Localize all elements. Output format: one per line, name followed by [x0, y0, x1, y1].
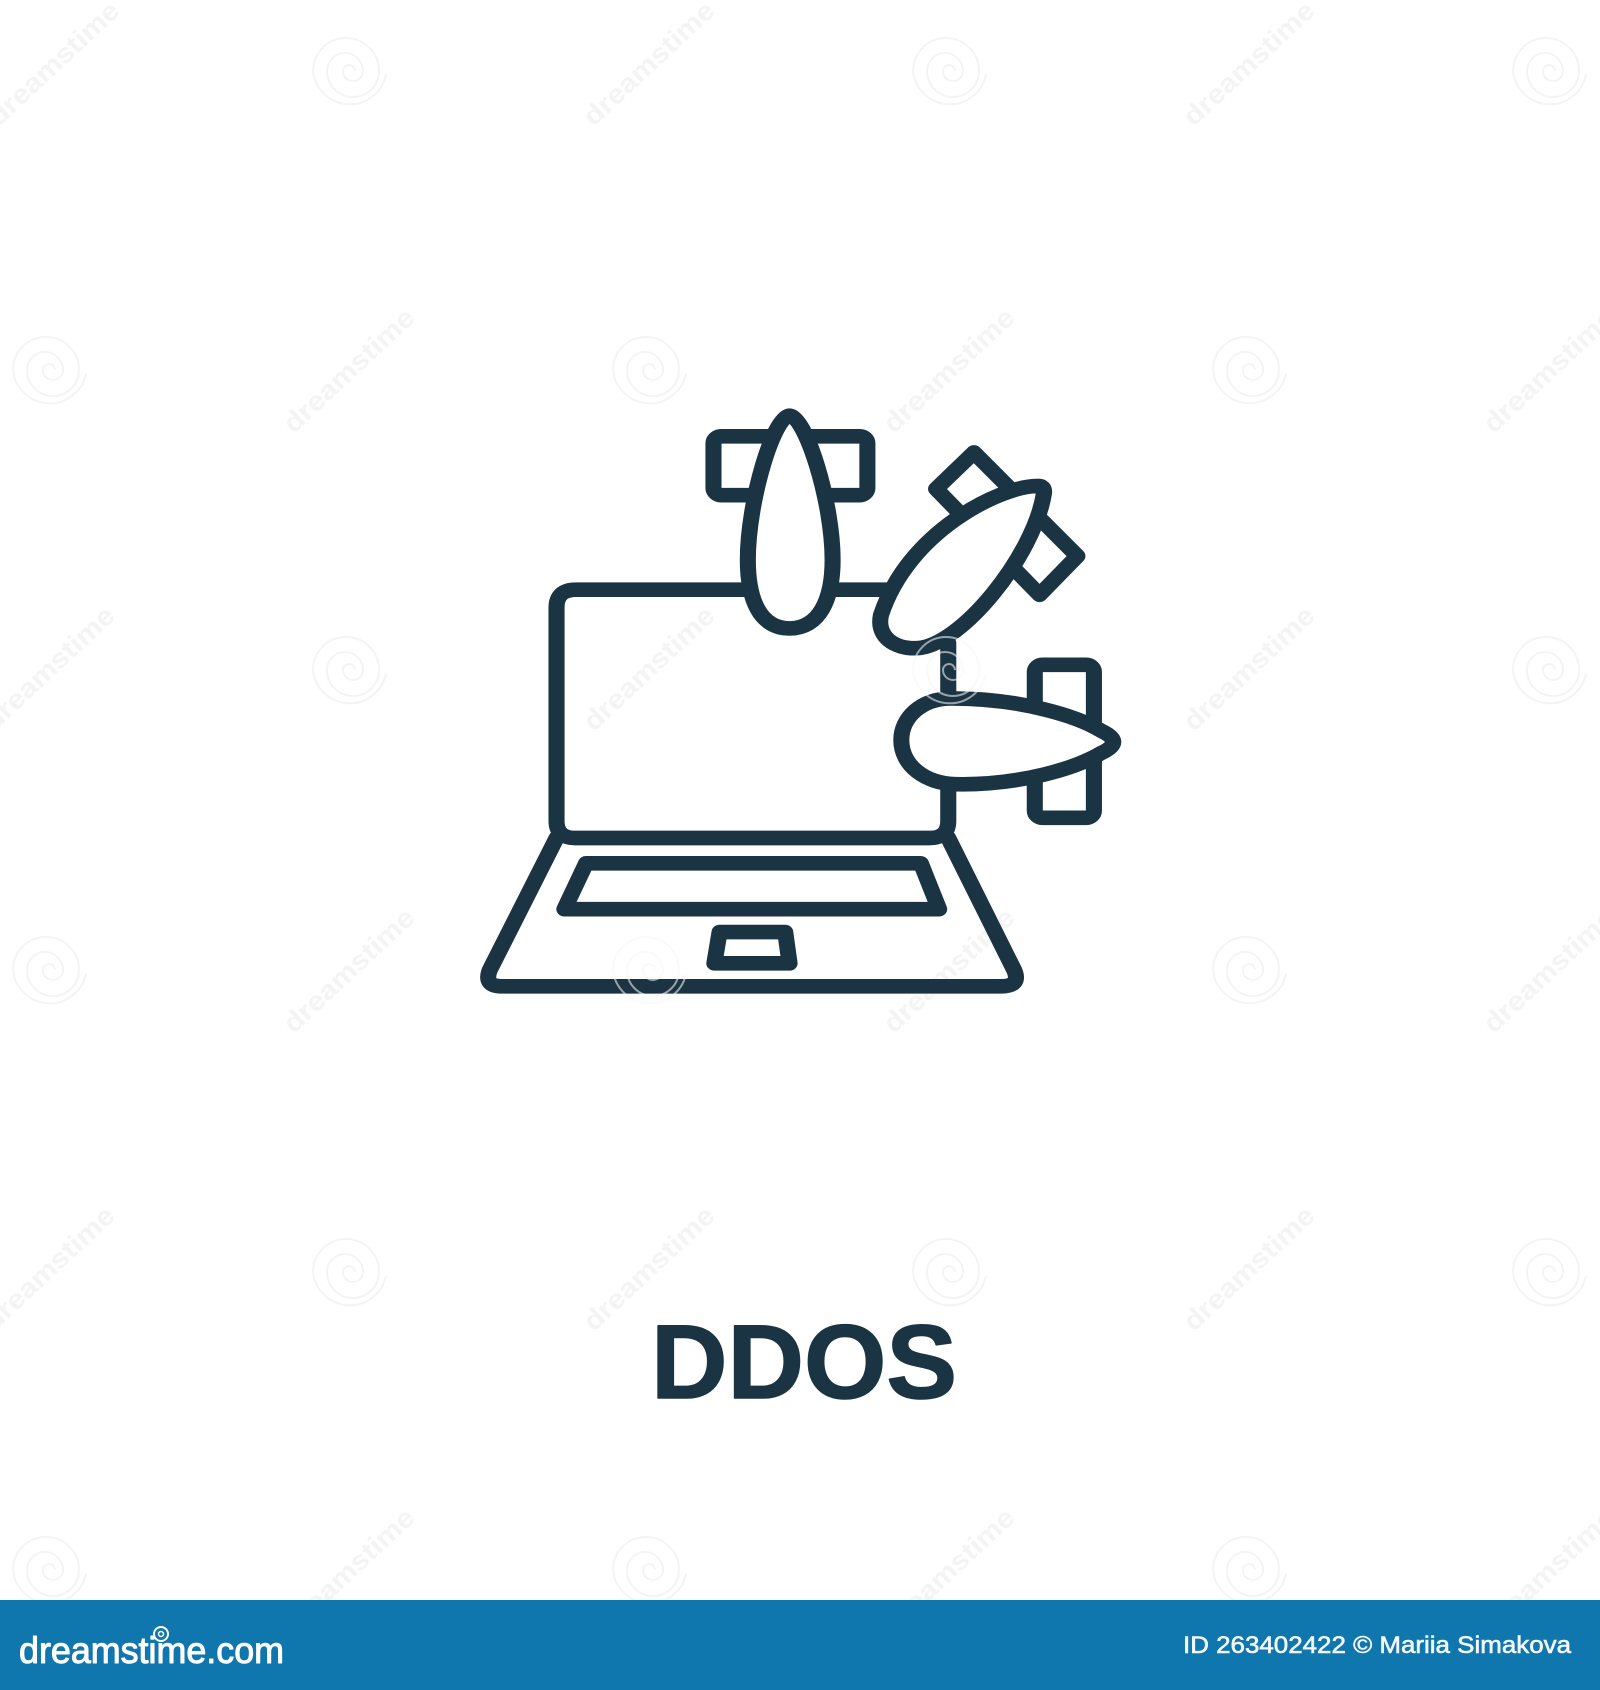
rocket 1 fins — [713, 436, 867, 495]
rocket 1 body — [748, 416, 833, 628]
watermark pattern: dreamstime — [277, 1502, 421, 1639]
watermark pattern: dreamstime — [1177, 0, 1321, 132]
footer credit: ID 263402422 © Mariia Simakova — [1183, 1632, 1571, 1659]
laptop base — [488, 838, 1016, 986]
rocket 3 body — [901, 698, 1113, 784]
laptop screen — [557, 590, 948, 838]
watermark pattern: dreamstime — [1177, 600, 1321, 737]
watermark pattern: dreamstime — [577, 1200, 721, 1337]
watermark pattern: dreamstime — [877, 1502, 1021, 1639]
watermark over icon — [613, 637, 986, 1003]
rocket 2 fins — [936, 452, 1077, 595]
icon: laptop under rocket attack — [480, 408, 1122, 994]
watermark pattern: dreamstime — [1177, 1200, 1321, 1337]
trackpad — [714, 932, 790, 963]
watermark pattern: dreamstime — [277, 902, 421, 1039]
rocket 3 fins — [1035, 665, 1094, 818]
watermark pattern: dreamstime — [577, 600, 721, 737]
footer logo: dreamstime.com: dreamstime.com — [19, 1630, 284, 1671]
watermark pattern: dreamstime — [877, 902, 1021, 1039]
title: DDOS: DDOS — [651, 1304, 957, 1421]
footer bar — [0, 1600, 1600, 1690]
rocket 2 body — [880, 486, 1044, 648]
watermark pattern: dreamstime — [577, 0, 721, 132]
watermark pattern: dreamstime — [277, 302, 421, 439]
keyboard — [564, 863, 939, 909]
watermark pattern: dreamstime — [877, 302, 1021, 439]
